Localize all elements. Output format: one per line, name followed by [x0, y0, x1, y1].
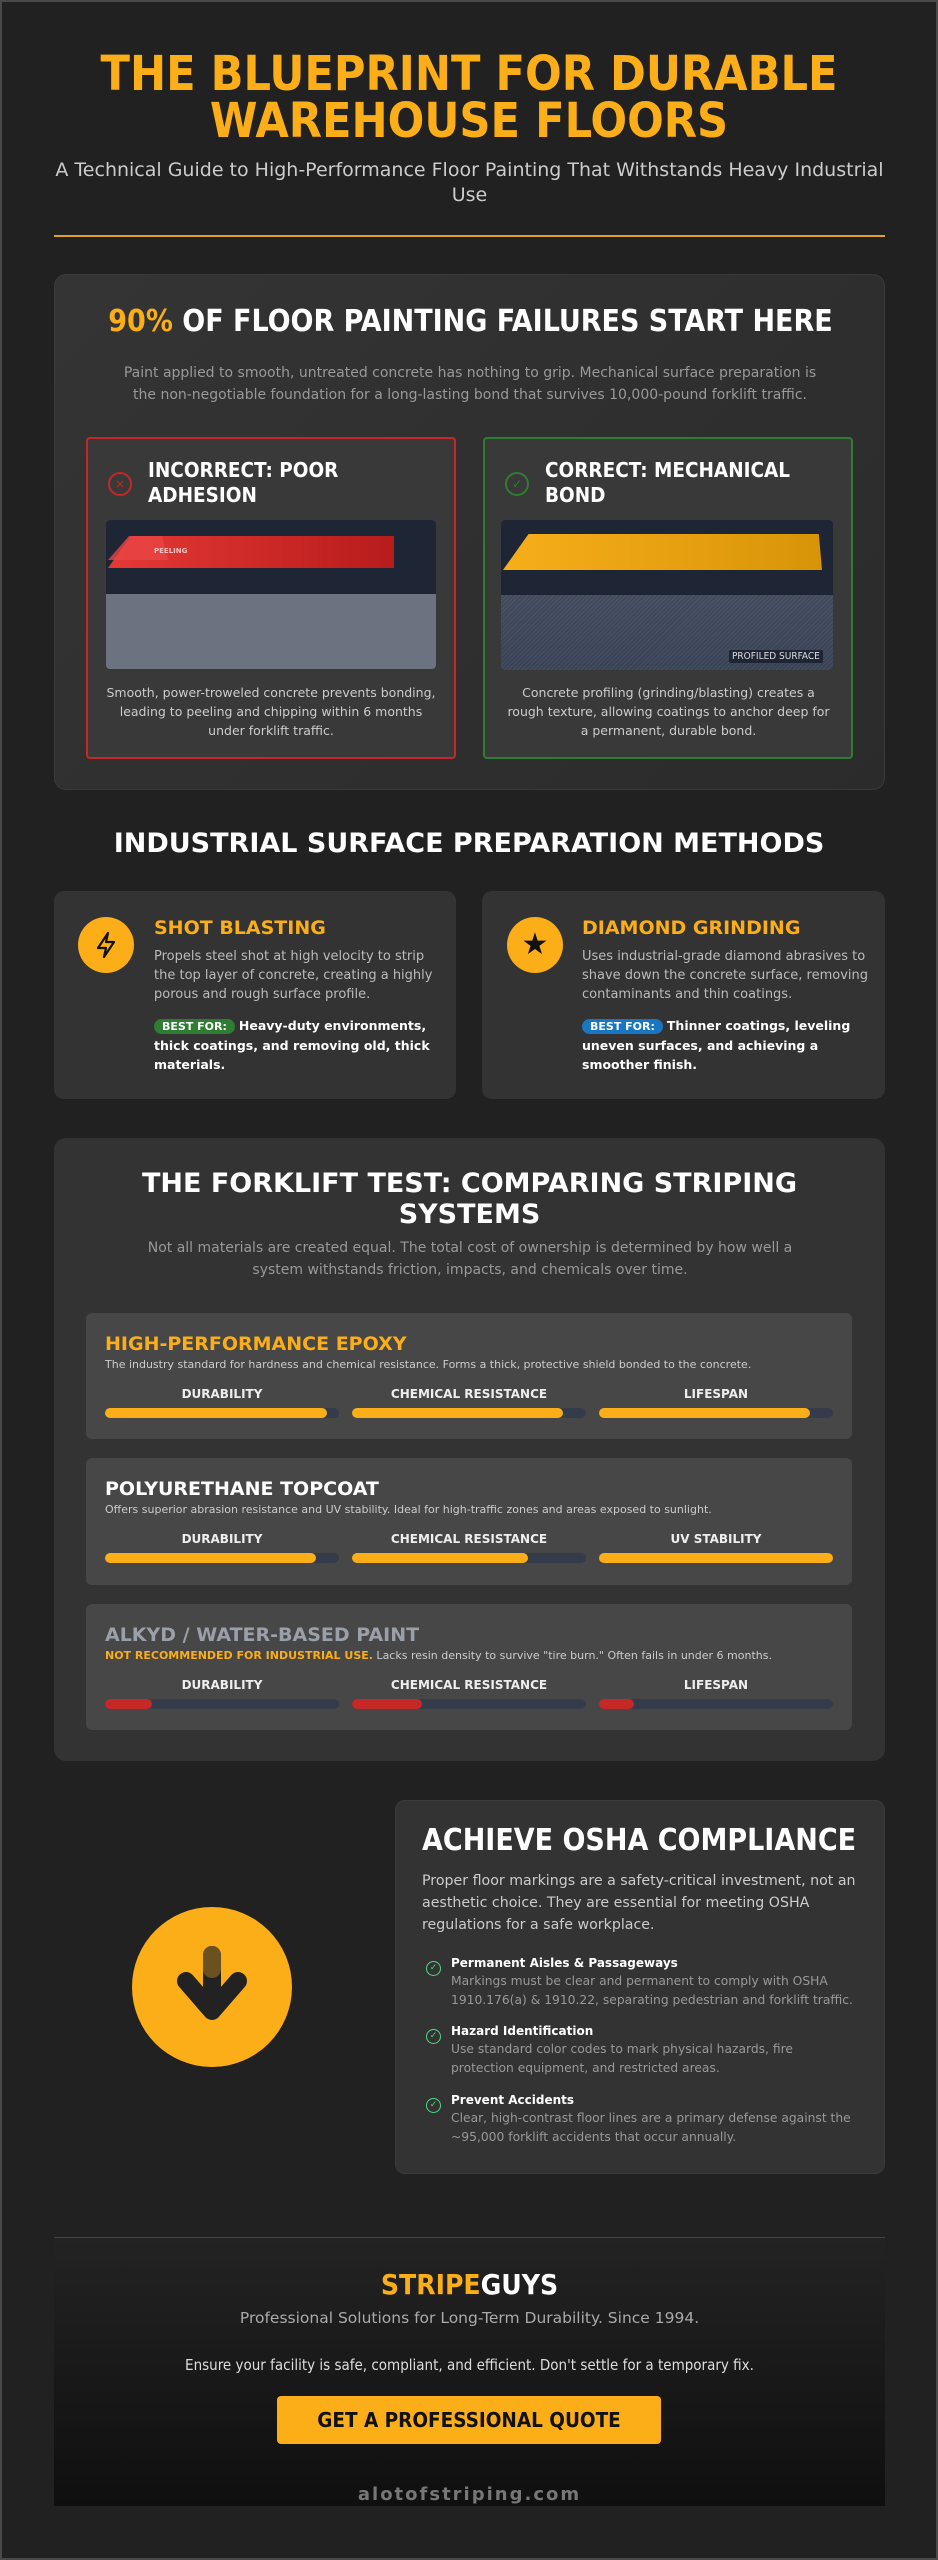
icon: check circle: ✓	[512, 477, 522, 491]
icon: bolt	[78, 917, 134, 973]
panel: OSHA: ✓	[430, 1963, 437, 1973]
material: polyurethane: DURABILITY	[182, 1532, 262, 1546]
material: epoxy: The industry standard for hardness and chemical resistance. Forms a thick, protective shield bonded to the concrete.	[105, 1358, 751, 1371]
icon: x circle: ×	[115, 477, 125, 491]
footer	[54, 2237, 885, 2506]
title: SHOT BLASTING	[154, 917, 326, 939]
caption: Concrete profiling (grinding/blasting) creates a rough texture, allowing coatings to anchor deep for a permanent, durable bond.	[507, 685, 830, 738]
heading: ACHIEVE OSHA COMPLIANCE	[422, 1823, 856, 1858]
heading: CORRECT: MECHANICAL	[545, 458, 790, 482]
material: epoxy	[86, 1313, 852, 1439]
heading: ADHESION	[148, 483, 257, 507]
item: accidents	[426, 2093, 851, 2144]
button	[277, 2396, 661, 2444]
panel heading: 90% OF FLOOR PAINTING FAILURES START HERE	[108, 304, 833, 339]
icon: down arrow circle	[132, 1907, 292, 2067]
panel: OSHA: Hazard Identification	[451, 2024, 593, 2038]
material: polyurethane: UV STABILITY	[670, 1532, 762, 1546]
title: DIAMOND GRINDING	[582, 917, 800, 939]
subtitle: A Technical Guide to High-Performance Floor Painting That Withstands Heavy Industrial Use	[55, 159, 884, 206]
tagline: Professional Solutions for Long-Term Durability. Since 1994.	[240, 2309, 699, 2327]
panel: OSHA: Markings must be clear and permanent to comply with OSHA 1910.176(a) & 1910.22, separating pedestrian and forklift traffic.	[451, 1974, 853, 2007]
panel: OSHA: Permanent Aisles & Passageways	[451, 1956, 678, 1970]
card: incorrect	[86, 437, 456, 759]
card: diamond grinding	[482, 891, 885, 1099]
panel: OSHA: Use standard color codes to mark physical hazards, fire protection equipment, and restricted areas.	[451, 2042, 793, 2075]
panel: failures	[54, 274, 885, 790]
item: aisles	[426, 1956, 853, 2007]
material: alkyd: NOT RECOMMENDED FOR INDUSTRIAL USE. Lacks resin density to survive "tire burn." Often fails in under 6 months.	[105, 1649, 772, 1662]
material: polyurethane: POLYURETHANE TOPCOAT	[105, 1478, 379, 1500]
illustration: bonded: PROFILED SURFACE	[732, 651, 820, 662]
heading: INCORRECT: POOR	[148, 458, 338, 482]
intro: Proper floor markings are a safety-critical investment, not an aesthetic choice. They are essential for meeting OSHA regulations for a safe workplace.	[422, 1873, 856, 1933]
material: alkyd: LIFESPAN	[684, 1678, 748, 1692]
logo: STRIPEGUYS	[381, 2268, 558, 2301]
material: epoxy: LIFESPAN	[684, 1387, 748, 1401]
material: alkyd	[86, 1604, 852, 1730]
heading	[545, 458, 790, 507]
icon: x circle	[108, 472, 132, 496]
heading: THE FORKLIFT TEST: COMPARING STRIPING SYSTEMS	[142, 1168, 797, 1230]
icon: check circle	[505, 472, 529, 496]
section heading: methods: INDUSTRIAL SURFACE PREPARATION METHODS	[114, 828, 824, 859]
panel: OSHA	[395, 1800, 885, 2174]
cta text: Ensure your facility is safe, compliant, and efficient. Don't settle for a temporary fix.	[185, 2356, 754, 2374]
title: WAREHOUSE FLOORS	[210, 93, 728, 149]
material: alkyd: DURABILITY	[182, 1678, 262, 1692]
best for: BEST FOR: Heavy-duty environments, thick coatings, and removing old, thick materials.	[154, 1018, 430, 1072]
material: alkyd: ALKYD / WATER-BASED PAINT	[105, 1624, 419, 1646]
material: epoxy: DURABILITY	[182, 1387, 262, 1401]
illustration: peeling	[106, 520, 436, 669]
title	[100, 46, 838, 149]
heading	[148, 458, 338, 507]
card: correct	[483, 437, 853, 759]
panel: OSHA: ✓	[430, 2031, 437, 2041]
material: epoxy: CHEMICAL RESISTANCE	[391, 1387, 547, 1401]
caption: Smooth, power-troweled concrete prevents bonding, leading to peeling and chipping within 6 months under forklift traffic.	[106, 685, 436, 738]
title: THE BLUEPRINT FOR DURABLE	[100, 46, 838, 102]
illustration: bonded	[501, 520, 833, 670]
card: shot blasting	[54, 891, 456, 1099]
description: Propels steel shot at high velocity to strip the top layer of concrete, creating a highly porous and rough surface profile.	[154, 949, 432, 1002]
url: alotofstriping.com	[358, 2484, 581, 2505]
panel: OSHA: ✓	[430, 2100, 437, 2110]
button: GET A PROFESSIONAL QUOTE	[317, 2408, 621, 2432]
illustration: peeling: PEELING	[154, 547, 187, 555]
heading: BOND	[545, 483, 605, 507]
material: polyurethane	[86, 1458, 852, 1585]
material: polyurethane: Offers superior abrasion resistance and UV stability. Ideal for high-traffic zones and areas exposed to sunlight.	[105, 1503, 712, 1516]
icon: star	[507, 917, 563, 973]
material: alkyd: CHEMICAL RESISTANCE	[391, 1678, 547, 1692]
best for: BEST FOR: Thinner coatings, leveling uneven surfaces, and achieving a smoother finish.	[582, 1018, 850, 1072]
material: polyurethane: CHEMICAL RESISTANCE	[391, 1532, 547, 1546]
description: Uses industrial-grade diamond abrasives to shave down the concrete surface, removing contaminants and thin coatings.	[582, 949, 868, 1002]
intro: Not all materials are created equal. The total cost of ownership is determined by how well a system withstands friction, impacts, and chemicals over time.	[148, 1240, 792, 1278]
panel: OSHA: Prevent Accidents	[451, 2093, 574, 2107]
item: hazard	[426, 2024, 793, 2075]
icon: star: ★	[522, 927, 548, 962]
material: epoxy: HIGH-PERFORMANCE EPOXY	[105, 1333, 406, 1355]
intro text: Paint applied to smooth, untreated concrete has nothing to grip. Mechanical surface preparation is the non-negotiable foundation for a long-lasting bond that survives 10,000-pound forklift traffic.	[124, 365, 816, 403]
panel: OSHA: Clear, high-contrast floor lines are a primary defense against the ~95,000 forklift accidents that occur annually.	[451, 2111, 851, 2144]
panel: forklift test	[54, 1138, 885, 1761]
